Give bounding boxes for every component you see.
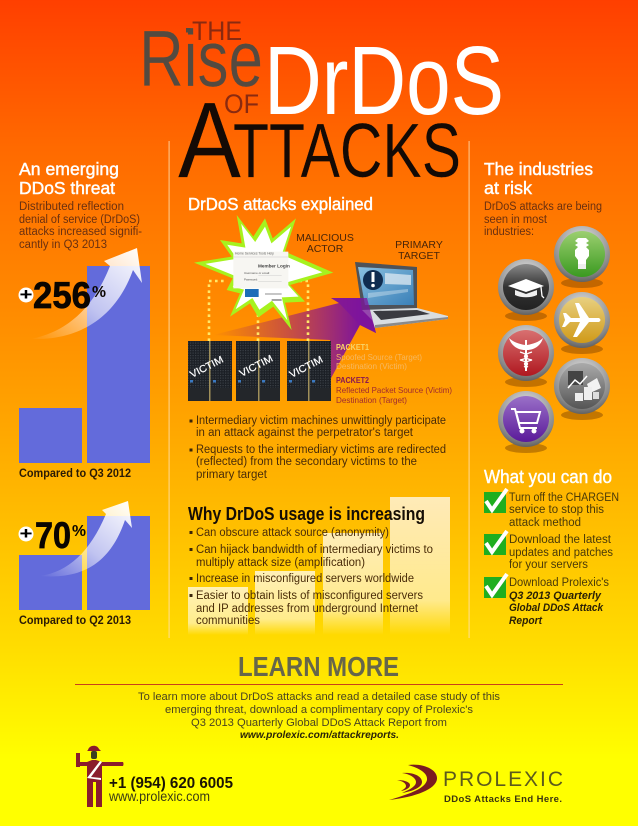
purple arrow head overlay [331, 298, 376, 333]
panel: industries at risk [484, 159, 610, 453]
dotted connectors [209, 281, 308, 341]
packet legend: Reflected Packet Source (Victim) [336, 385, 452, 395]
packet legend: PACKET2 [336, 376, 369, 385]
arrow: growth 70 [40, 501, 132, 576]
stat: +70% [18, 515, 86, 556]
bullet list: explanation: in an attack against the perpetrator's target [196, 427, 414, 439]
title: OF: OF [224, 89, 259, 119]
heading: emerging threat: An emerging [19, 159, 119, 179]
intro text: industries: [484, 226, 534, 238]
bullet list: explanation [190, 415, 446, 481]
learn more text: emerging threat, download a complimentary copy of Prolexic's [165, 704, 473, 716]
icon: light bulb energy [554, 226, 610, 288]
bar chart: Q2 2013 comparison: Compared to Q2 2013 [19, 615, 131, 627]
action 3: Q3 2013 Quarterly [509, 590, 602, 602]
bullet list: reasons: Easier to obtain lists of misconfigured servers [196, 590, 423, 602]
heading: industries [484, 159, 593, 198]
title: DrDoS: DrDoS [264, 26, 504, 135]
packet legend: Spoofed Source (Target) [336, 352, 422, 362]
icon: starburst malicious actor [194, 215, 333, 330]
server 3: VICTIM [288, 355, 325, 381]
icon: starburst malicious actor: Member Login [258, 264, 290, 269]
panel: why usage is increasing [188, 497, 450, 635]
label: malicious actor: MALICIOUS [296, 232, 354, 244]
server 1 [188, 341, 232, 401]
stat: +256%: + [20, 285, 33, 304]
action 1 [484, 489, 619, 529]
label: malicious actor [296, 232, 354, 255]
action 2: updates and patches [509, 547, 613, 559]
heading: industries: at risk [484, 178, 532, 198]
bullet list: reasons: and IP addresses from underground Internet [196, 603, 419, 615]
packet legend: PACKET1 [336, 343, 369, 352]
intro text: cantly in Q3 2013 [19, 239, 107, 251]
heading: industries: The industries [484, 159, 593, 179]
heading: attacks explained: DrDoS attacks explained [188, 194, 373, 214]
label: primary target: PRIMARY [395, 239, 443, 251]
learn more text: Q3 2013 Quarterly Global DDoS Attack Report from [191, 717, 447, 729]
pale rising bars [188, 497, 450, 635]
stat: +70%: + [20, 524, 33, 543]
servers: victim machines [188, 341, 331, 401]
logo: Prolexic [389, 765, 563, 805]
rule [75, 684, 563, 685]
title [139, 14, 504, 200]
arrow: growth 256 [30, 248, 142, 339]
packet legend: Destination (Victim) [336, 361, 407, 371]
learn more text: To learn more about DrDoS attacks and read a detailed case study of this [138, 691, 500, 703]
stat: +256%: % [92, 284, 106, 301]
bullet list: reasons: communities [196, 615, 260, 627]
stat: +70%: % [72, 523, 86, 540]
panel: attacks explained [188, 194, 452, 481]
contact details: www.prolexic.com [108, 788, 210, 804]
panel: what you can do [484, 466, 619, 627]
bullet list: reasons: multiply attack size (amplification) [196, 557, 365, 569]
label: malicious actor: ACTOR [307, 243, 344, 255]
icon: graduation cap education [498, 259, 554, 321]
packet legend [336, 343, 452, 405]
action 3 [484, 574, 609, 627]
action 3: Report [509, 615, 543, 627]
column divider left [168, 141, 170, 638]
bullet list: reasons: Increase in misconfigured servers worldwide [196, 573, 414, 585]
action 1: Turn off the CHARGEN [509, 492, 619, 504]
intro text [484, 201, 602, 238]
contact details: +1 (954) 620 6005 [109, 775, 233, 792]
bullet list: explanation: Intermediary victim machines unwittingly participate [196, 415, 446, 427]
action 2 [484, 531, 613, 571]
bullet list: explanation: (reflected) from the secondary victims to the [196, 456, 417, 468]
server 2 [236, 341, 280, 401]
intro text: DrDoS attacks are being [484, 201, 602, 213]
bullet list: explanation: primary target [196, 469, 268, 481]
bullet list: reasons: Can obscure attack source (anonymity) [196, 527, 389, 539]
server 2: VICTIM [238, 354, 275, 380]
panel: learn more [75, 651, 563, 741]
icon: starburst malicious actor: Username or email: [244, 271, 270, 275]
intro text [19, 201, 142, 251]
stat: +70%: 70 [35, 515, 71, 556]
label: primary target: TARGET [398, 250, 440, 262]
bullet list: explanation: Requests to the intermediary victims are redirected [196, 444, 446, 456]
action 1: attack method [509, 517, 581, 529]
action 1: service to stop this [509, 504, 604, 516]
title: Rise: Rise [139, 14, 263, 103]
action 2: Download the latest [509, 534, 612, 546]
icon: laptop [355, 262, 448, 328]
icon: shopping cart retail [498, 391, 554, 453]
intro text: attacks increased signifi- [19, 226, 142, 238]
title: TTACKS: TTACKS [233, 108, 461, 194]
intro text: Distributed reflection [19, 201, 124, 213]
action 2: for your servers [509, 559, 588, 571]
heading: why usage is increasing: Why DrDoS usage is increasing [188, 504, 425, 524]
learn more text: www.prolexic.com/attackreports. [240, 729, 399, 741]
title: A: A [178, 79, 241, 200]
heading: emerging threat: DDoS threat [19, 178, 115, 198]
action 3: Download Prolexic's [509, 577, 609, 589]
stat: +256%: 256 [33, 275, 91, 316]
server 1: VICTIM [188, 355, 225, 381]
contact details [108, 775, 233, 804]
icon: check 1 [484, 489, 507, 513]
logo swoosh [389, 765, 437, 800]
learn more text [138, 691, 500, 741]
column divider right [468, 141, 470, 638]
title: THE: THE [192, 16, 242, 46]
label: primary target [395, 239, 443, 262]
heading: emerging threat [19, 159, 119, 198]
icon: check 3 [484, 574, 507, 598]
bar chart: Q3 2012 comparison: Compared to Q3 2012 [19, 468, 131, 480]
logo wordmark: PROLEXIC [443, 768, 563, 791]
icon: airplane travel [554, 292, 610, 354]
title: dot [186, 28, 190, 32]
logo tagline: DDoS Attacks End Here. [444, 794, 562, 805]
intro text: denial of service (DrDoS) [19, 214, 140, 226]
icon: starburst malicious actor: Password: [244, 278, 258, 282]
intro text: seen in most [484, 214, 548, 226]
icon: traffic officer [76, 746, 124, 807]
bar chart: Q2 2013 comparison [19, 516, 150, 627]
server 3 [287, 341, 331, 401]
bar chart: Q3 2012 comparison [19, 266, 150, 480]
icon: caduceus healthcare [498, 325, 554, 387]
heading: what you can do: What you can do [484, 466, 612, 487]
panel: emerging threat [18, 159, 150, 627]
purple arrow [213, 298, 376, 380]
bullet list: reasons: Can hijack bandwidth of intermediary victims to [196, 544, 433, 556]
heading: learn more: LEARN MORE [238, 651, 399, 682]
packet legend: Destination (Target) [336, 395, 407, 405]
action 3: Global DDoS Attack [509, 602, 604, 614]
icon: chart and coins finance [554, 358, 610, 420]
icon: starburst malicious actor: Home Services Tools Help [235, 252, 274, 256]
bullet list: reasons [190, 527, 433, 627]
icon: check 2 [484, 531, 507, 555]
